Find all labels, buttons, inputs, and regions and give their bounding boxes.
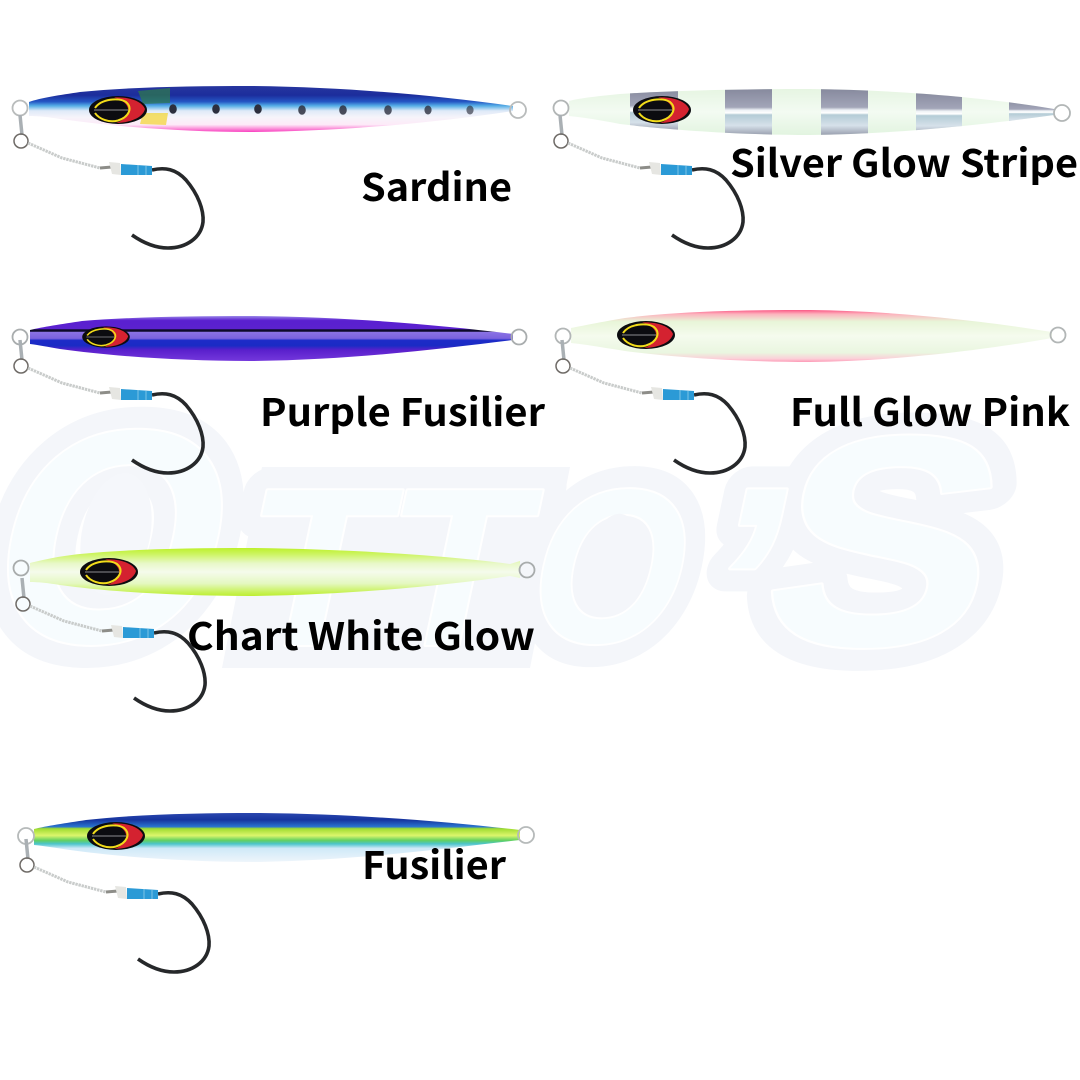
label: Chart White Glow: Chart White Glow xyxy=(187,606,535,661)
silver stripes xyxy=(630,88,1055,136)
eye: Fusilier xyxy=(87,822,145,850)
lure body: Sardine xyxy=(29,86,513,132)
lure: Silver Glow Stripe xyxy=(554,88,1070,248)
label: Silver Glow Stripe: Silver Glow Stripe xyxy=(730,133,1078,188)
eye: Sardine xyxy=(89,96,147,124)
hook: Chart White Glow xyxy=(16,578,205,711)
hook: Purple Fusilier xyxy=(14,340,203,473)
lure body: Full Glow Pink xyxy=(571,310,1052,362)
eye: Purple Fusilier xyxy=(82,326,130,348)
throat colour: Sardine xyxy=(140,113,168,125)
eye: Silver Glow Stripe xyxy=(633,96,691,124)
label: Fusilier: Fusilier xyxy=(362,835,506,890)
lure: Full Glow Pink xyxy=(556,310,1066,473)
label: Sardine: Sardine xyxy=(361,157,512,212)
label: Purple Fusilier: Purple Fusilier xyxy=(260,382,545,437)
lure: Sardine xyxy=(12,86,526,248)
split rings: Silver Glow Stripe xyxy=(554,100,1070,121)
split rings: Purple Fusilier xyxy=(12,330,526,344)
lure: Chart White Glow xyxy=(14,548,534,711)
eye: Chart White Glow xyxy=(80,558,138,586)
lure: Purple Fusilier xyxy=(12,316,526,473)
lure body: Fusilier xyxy=(34,813,520,862)
watermark: OTTO'S logo xyxy=(0,368,1034,742)
label: Full Glow Pink: Full Glow Pink xyxy=(790,382,1070,437)
hook: Fusilier xyxy=(20,839,209,972)
hook: Silver Glow Stripe xyxy=(554,115,743,248)
split rings: Sardine xyxy=(12,100,526,118)
head marking: Sardine xyxy=(138,88,170,104)
lure: Fusilier xyxy=(18,813,534,972)
lure body: Purple Fusilier xyxy=(30,316,513,361)
split rings: Chart White Glow xyxy=(14,560,534,578)
hook: Full Glow Pink xyxy=(556,340,745,473)
side dots: Sardine xyxy=(169,104,474,115)
split rings: Fusilier xyxy=(18,827,534,844)
eye: Full Glow Pink xyxy=(617,321,675,349)
lure body: Silver Glow Stripe xyxy=(569,89,1054,135)
hook: Sardine xyxy=(14,115,203,248)
split rings: Full Glow Pink xyxy=(556,328,1066,344)
lure body: Chart White Glow xyxy=(30,548,520,596)
